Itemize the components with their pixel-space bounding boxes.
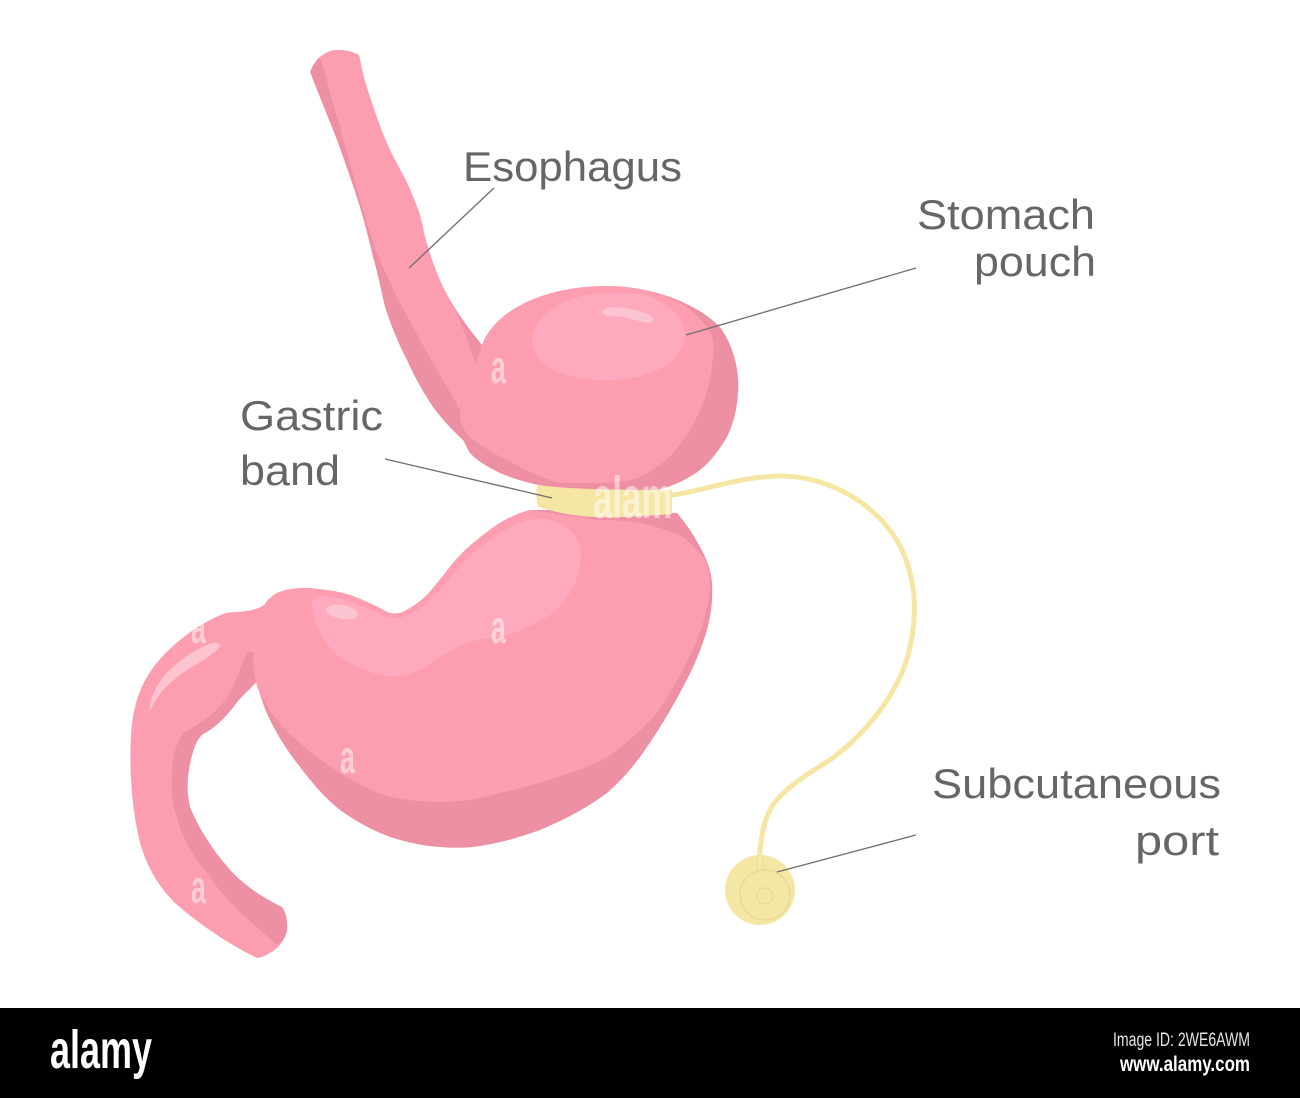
label: subcutaneous port	[777, 760, 1221, 872]
stomach pouch	[459, 286, 738, 494]
label: gastric band	[240, 392, 552, 498]
esophagus	[310, 50, 490, 448]
pouch highlight	[532, 293, 685, 380]
gastric band	[536, 485, 672, 517]
label: stomach pouch	[686, 191, 1096, 335]
gastric band tube	[672, 476, 914, 868]
label: stomach pouch: pouch	[974, 238, 1096, 285]
footer website: www.alamy.com	[1119, 1053, 1250, 1076]
footer image id: Image ID: 2WE6AWM	[1113, 1030, 1250, 1051]
label: subcutaneous port: port	[1135, 817, 1219, 864]
pouch shine	[602, 307, 653, 323]
stomach shine	[325, 602, 359, 622]
duodenum shine	[150, 643, 220, 711]
label: esophagus	[409, 143, 682, 268]
duodenum	[130, 605, 287, 958]
watermark: a	[491, 601, 507, 653]
label: gastric band: band	[240, 447, 340, 494]
subcutaneous port	[725, 855, 795, 925]
watermark	[191, 341, 672, 913]
label: gastric band: Gastric	[240, 392, 383, 439]
stomach highlight	[312, 519, 581, 676]
watermark: a	[340, 731, 356, 783]
label: esophagus: Esophagus	[463, 143, 682, 190]
footer bar	[0, 1008, 1300, 1098]
watermark: a	[491, 341, 507, 393]
watermark: a	[191, 601, 207, 653]
watermark: a	[191, 861, 207, 913]
label: stomach pouch: Stomach	[917, 191, 1095, 238]
label: subcutaneous port: Subcutaneous	[932, 760, 1221, 807]
footer logo: alamy	[50, 1020, 152, 1080]
watermark: alam	[593, 466, 672, 531]
lower stomach	[253, 510, 712, 848]
